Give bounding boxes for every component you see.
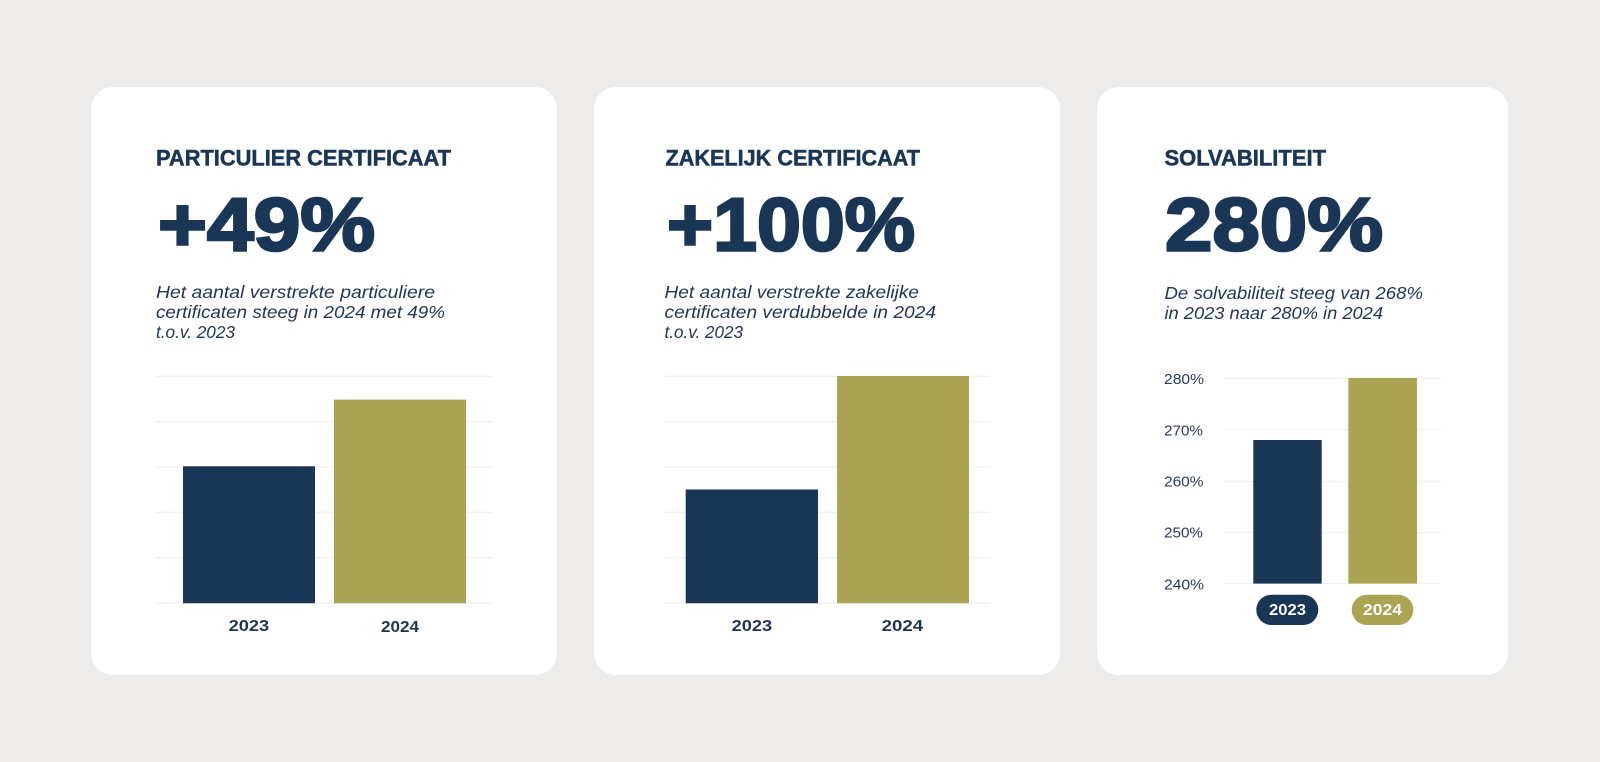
y axis labels	[1164, 371, 1204, 594]
legend pill: 2023	[1256, 595, 1318, 625]
description: particulier: t.o.v. 2023	[156, 322, 235, 342]
y axis labels: 270%	[1164, 422, 1203, 440]
heading: solvabiliteit: SOLVABILITEIT	[1164, 146, 1327, 170]
description: zakelijk: t.o.v. 2023	[664, 322, 743, 342]
bar chart: zakelijk	[664, 376, 990, 635]
legend pill: 2024: 2024	[1363, 602, 1402, 619]
description: solvabiliteit	[1164, 283, 1423, 323]
heading: zakelijk certificaat: ZAKELIJK CERTIFICAAT	[666, 146, 921, 170]
panel: solvabiliteit	[1097, 87, 1508, 675]
description: particulier	[156, 282, 445, 342]
bar: 2024	[837, 376, 969, 603]
big number: +100%: +100%	[667, 182, 915, 266]
bar: 2023	[183, 466, 315, 603]
heading: particulier certificaat: PARTICULIER CERTIFICAAT	[156, 146, 452, 170]
panel: zakelijk certificaat	[594, 87, 1060, 675]
bar: 2024	[334, 400, 466, 603]
axis label: 2023: 2023	[732, 618, 772, 635]
description: zakelijk	[664, 282, 936, 342]
y axis labels: 260%	[1164, 474, 1204, 490]
axis label: 2024: 2024	[882, 618, 923, 635]
y axis labels: 250%	[1164, 524, 1203, 542]
big number: 280%: 280%	[1165, 182, 1383, 266]
legend pill: 2023: 2023	[1269, 602, 1306, 619]
bar chart: particulier	[156, 376, 493, 636]
description: particulier: certificaten steeg in 2024 met 49%	[156, 302, 445, 322]
big number: +49%: +49%	[158, 182, 375, 266]
axis label: 2023: 2023	[229, 618, 269, 635]
y axis labels: 280%	[1164, 371, 1204, 388]
description: solvabiliteit: De solvabiliteit steeg van 268%	[1164, 283, 1423, 303]
bar: 2023	[686, 490, 818, 603]
description: zakelijk: Het aantal verstrekte zakelijke	[664, 282, 919, 302]
bar: 2023	[1253, 440, 1322, 584]
description: solvabiliteit: in 2023 naar 280% in 2024	[1164, 303, 1383, 323]
bar chart: solvabiliteit	[1164, 371, 1442, 625]
bar: 2024	[1348, 378, 1417, 584]
axis label: 2024: 2024	[381, 619, 419, 636]
panel: particulier certificaat	[91, 87, 557, 675]
y axis labels: 240%	[1164, 576, 1204, 594]
description: zakelijk: certificaten verdubbelde in 2024	[664, 302, 936, 322]
description: particulier: Het aantal verstrekte particuliere	[156, 282, 435, 302]
legend pill: 2024	[1352, 595, 1413, 625]
